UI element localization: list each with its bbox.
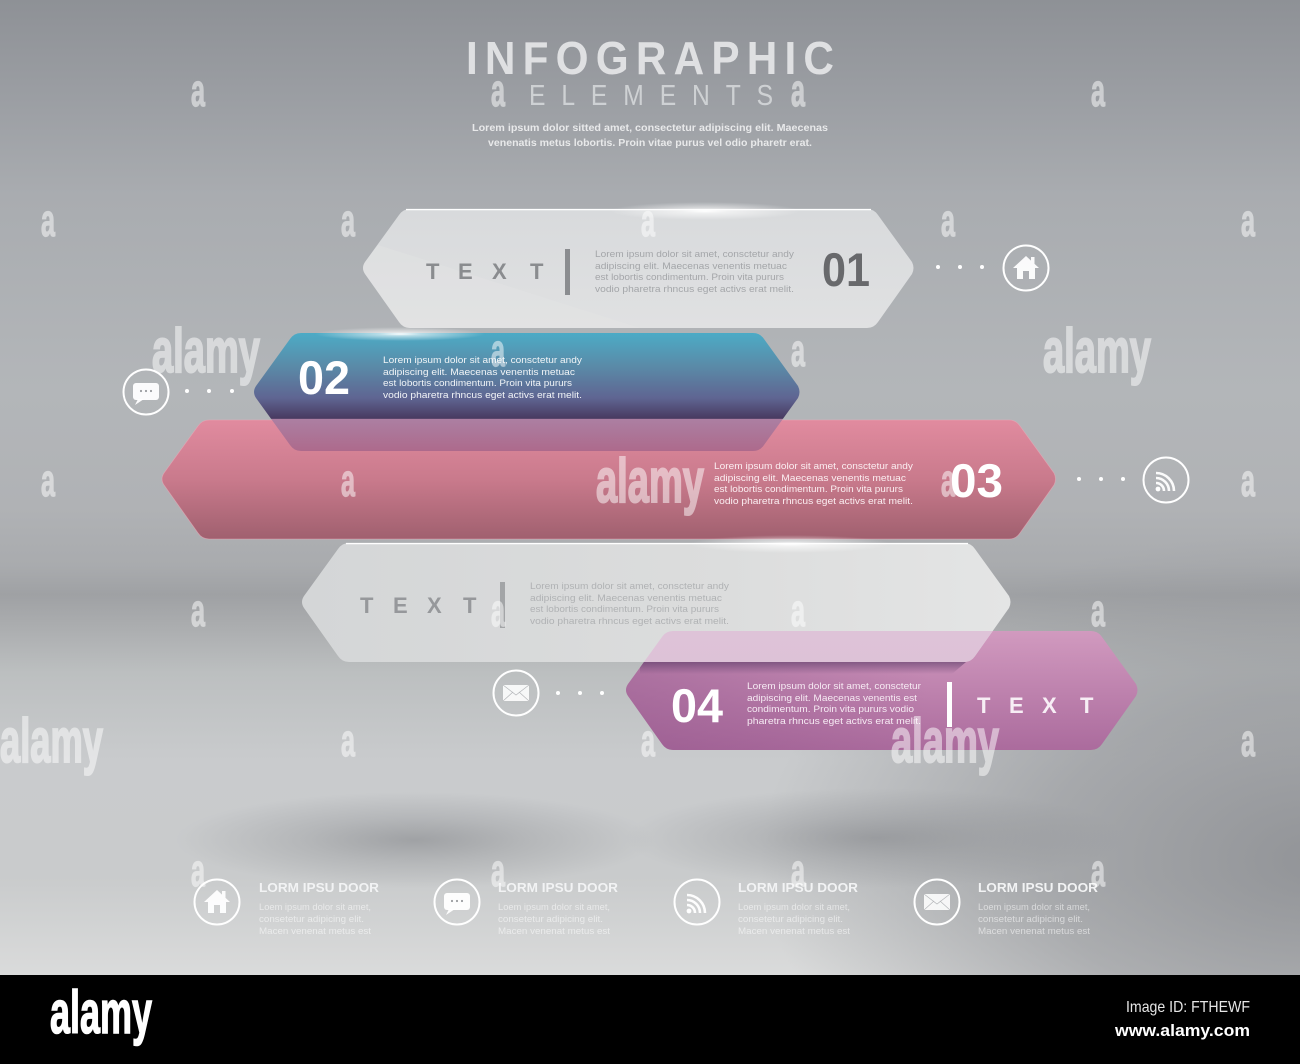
body text [530,581,729,627]
watermark small marks: a [791,65,806,116]
legend item: home: Macen venenat metus est [259,926,372,936]
watermark small marks: a [41,195,56,246]
legend item: mail: Loem ipsum dolor sit amet, [978,902,1090,912]
body text 03 [714,461,913,507]
divider 04 [947,682,952,727]
connector and icon: rss [1077,458,1188,502]
body text 01: adipiscing elit. Maecenas venentis metuac [595,261,787,272]
legend item: home: Loem ipsum dolor sit amet, [259,902,371,912]
label TEXT 04: TEXT [977,693,1094,718]
light flares [315,202,890,553]
body text: vodio pharetra rhncus eget activs erat melit. [530,616,729,627]
body text 01: vodio pharetra rhncus eget activs erat melit. [595,284,794,295]
watermark large logos: alamy [0,707,103,776]
watermark small marks: a [941,455,956,506]
legend item: rss: consetetur adipicing elit. [738,914,843,924]
floor shadows [175,788,1125,888]
watermark small marks: a [341,715,356,766]
body text 02: Lorem ipsum dolor sit amet, consctetur andy [383,355,582,366]
watermark small marks: a [941,195,956,246]
connector and icon: chat [124,370,234,414]
body text 04 [747,681,921,727]
watermark small marks: a [491,325,506,376]
watermark small marks: a [641,715,656,766]
body text 04: Lorem ipsum dolor sit amet, consctetur [747,681,921,692]
panel: bar 01 glass [363,209,914,328]
watermark large logos: alamy [1043,317,1151,386]
watermark small marks: a [191,585,206,636]
watermark small marks: a [341,195,356,246]
legend item: chat: Loem ipsum dolor sit amet, [498,902,610,912]
legend item: rss: Macen venenat metus est [738,926,851,936]
body text 02: est lobortis condimentum. Proin vita pururs [383,378,572,389]
body text 03: est lobortis condimentum. Proin vita pururs [714,484,903,495]
body text: est lobortis condimentum. Proin vita pururs [530,604,719,615]
body text 03: adipiscing elit. Maecenas venentis metuac [714,473,906,484]
body text 03: vodio pharetra rhncus eget activs erat melit. [714,496,913,507]
overlap with purple bar [644,631,992,662]
legend item: mail: consetetur adipicing elit. [978,914,1083,924]
body text 01: est lobortis condimentum. Proin vita pururs [595,272,784,283]
body text 01 [595,249,794,295]
watermark small marks [41,65,1256,896]
watermark small marks: a [1241,195,1256,246]
legend item: home: consetetur adipicing elit. [259,914,364,924]
footer logo: alamy [50,979,152,1046]
watermark small marks: a [791,845,806,896]
divider [500,582,505,628]
watermark small marks: a [41,455,56,506]
body text: Lorem ipsum dolor sit amet, consctetur andy [530,581,729,592]
watermark small marks: a [491,585,506,636]
panel: bar 04 purple [626,631,1138,750]
label TEXT: TEXT [360,593,477,618]
panel: bar 02 blue [254,333,800,451]
watermark large logos: alamy [152,317,260,386]
watermark large logos [0,317,1151,776]
website: www.alamy.com [1114,1021,1250,1040]
title: INFOGRAPHIC [466,33,841,84]
watermark small marks: a [641,195,656,246]
number 03: 03 [950,454,1003,507]
watermark small marks: a [1241,455,1256,506]
body text 04: pharetra rhncus eget activs erat melit. [747,716,921,727]
number 02: 02 [298,351,350,404]
legend item: chat [434,880,619,936]
watermark small marks: a [1091,845,1106,896]
intro text: venenatis metus lobortis. Proin vitae purus vel odio pharetr erat. [488,138,812,149]
watermark small marks: a [191,845,206,896]
legend item: home: LORM IPSU DOOR [259,880,380,895]
legend item: mail: Macen venenat metus est [978,926,1091,936]
body text 02 [383,355,582,401]
number 04: 04 [671,679,723,732]
subtitle: ELEMENTS [529,79,789,111]
body text 04: adipiscing elit. Maecenas venentis est [747,693,917,704]
legend item: chat: Macen venenat metus est [498,926,611,936]
divider 01 [565,249,570,295]
watermark small marks: a [1091,585,1106,636]
intro text [472,123,828,149]
legend item: rss [674,880,859,936]
legend item: rss: LORM IPSU DOOR [738,880,859,895]
footer bar [0,975,1300,1064]
body text 04: condimentum. Proin vita pururs vodio [747,704,914,715]
body text 02: vodio pharetra rhncus eget activs erat melit. [383,390,582,401]
legend item: chat: LORM IPSU DOOR [498,880,619,895]
legend item: mail [914,880,1099,936]
watermark small marks: a [341,455,356,506]
legend item: chat: consetetur adipicing elit. [498,914,603,924]
title [466,33,841,111]
label TEXT 01: TEXT [426,259,544,284]
watermark small marks: a [1091,65,1106,116]
legend item: home [194,880,380,936]
watermark large logos: alamy [891,707,999,776]
watermark small marks: a [491,65,506,116]
panel: bar 04 glass [302,543,1010,662]
image id: Image ID: FTHEWF [1126,999,1250,1016]
watermark small marks: a [491,845,506,896]
body text 01: Lorem ipsum dolor sit amet, consctetur andy [595,249,794,260]
watermark small marks: a [191,65,206,116]
body text: adipiscing elit. Maecenas venentis metuac [530,593,722,604]
legend item: rss: Loem ipsum dolor sit amet, [738,902,850,912]
legend item: mail: LORM IPSU DOOR [978,880,1099,895]
watermark small marks: a [791,585,806,636]
body text 03: Lorem ipsum dolor sit amet, consctetur andy [714,461,913,472]
connector and icon: home [936,246,1048,290]
intro text: Lorem ipsum dolor sitted amet, consectetur adipiscing elit. Maecenas [472,123,828,134]
watermark large logos: alamy [596,447,704,516]
panel: bar 03 pink [162,420,1056,539]
watermark small marks: a [1241,715,1256,766]
body text 02: adipiscing elit. Maecenas venentis metuac [383,367,575,378]
number 01: 01 [822,243,870,296]
watermark small marks: a [791,325,806,376]
connector and icon: mail [494,670,604,716]
